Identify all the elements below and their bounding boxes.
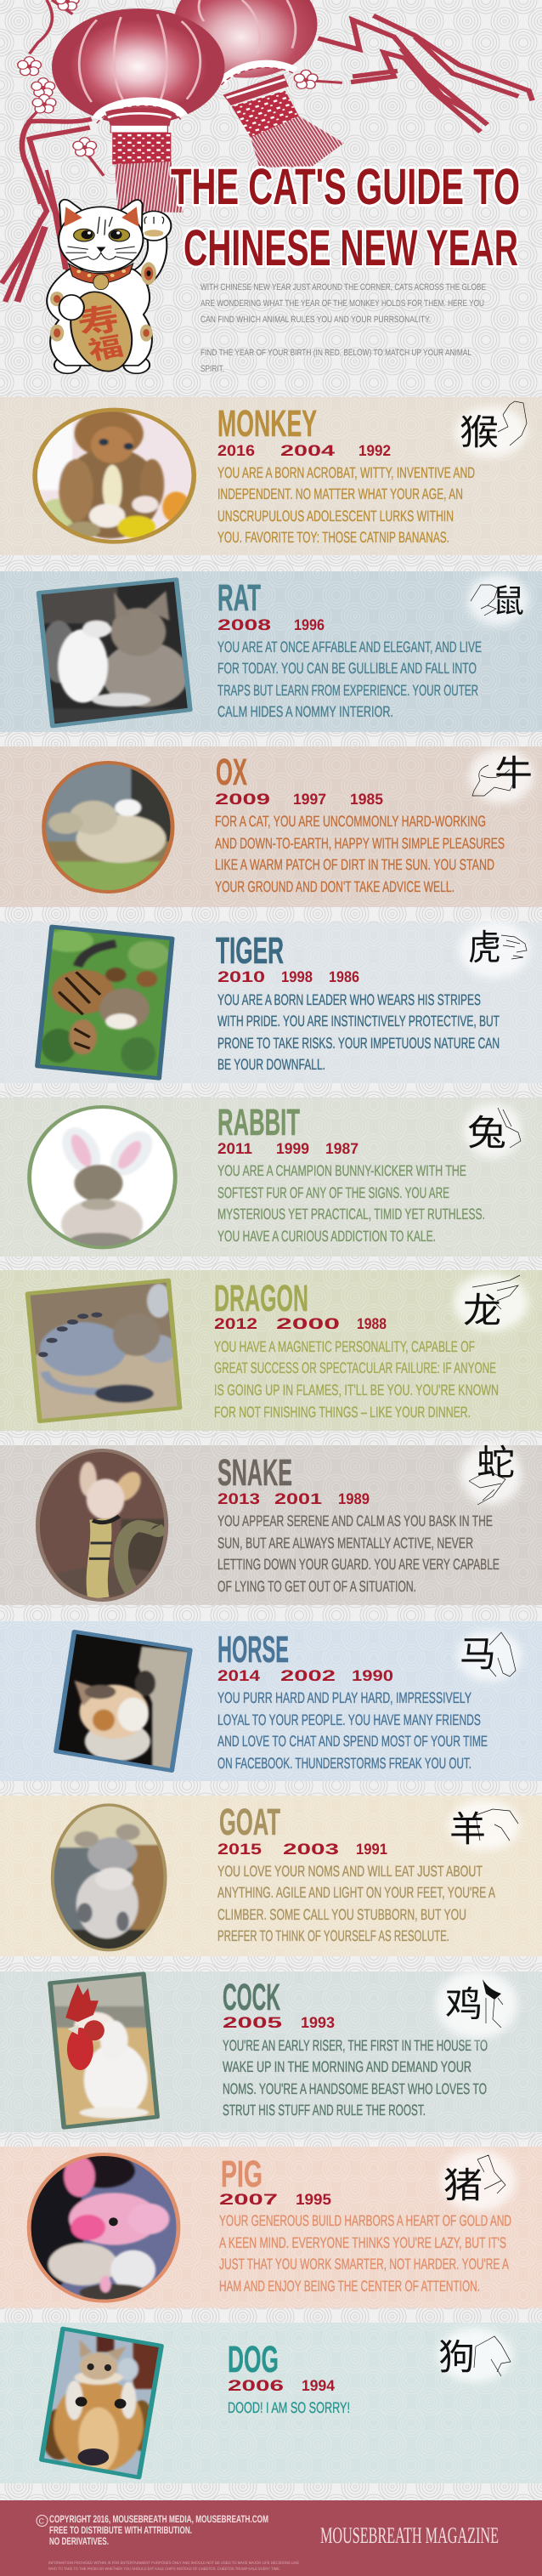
intro text: FIND THE YEAR OF YOUR BIRTH (IN RED, BELOW) TO MATCH UP YOUR ANIMAL [200, 348, 471, 358]
copyright symbol: C [39, 2516, 44, 2525]
ink emblem: rooster [436, 1971, 517, 2039]
heading: SNAKE [217, 1452, 292, 1494]
years: 2007 [219, 2191, 278, 2208]
years: 2010 [217, 968, 265, 985]
years [228, 2377, 335, 2394]
years [214, 1315, 387, 1332]
years [217, 1140, 359, 1157]
description: CALM HIDES A NOMMY INTERIOR. [217, 703, 393, 720]
years: 1989 [338, 1490, 370, 1507]
heading: GOAT [219, 1801, 280, 1843]
description [223, 2037, 488, 2119]
header illustration: lanterns, ribbons and blossoms [2, 0, 533, 302]
ink emblem: ox [469, 749, 534, 803]
panel: goat [0, 1796, 542, 1956]
description: STRUT HIS STUFF AND RULE THE ROOST. [223, 2102, 426, 2119]
intro text [200, 282, 486, 374]
panel: rabbit [0, 1098, 542, 1257]
photo: cat in tiger suit [35, 924, 177, 1080]
heading: RABBIT [217, 1102, 300, 1143]
years: 1987 [325, 1140, 359, 1157]
panel: snake [0, 1443, 542, 1605]
ears [59, 200, 143, 235]
heading: TIGER [216, 930, 284, 972]
description [217, 638, 482, 720]
years: 2014 [217, 1667, 260, 1684]
heading: PIG [221, 2153, 263, 2195]
description: BE YOUR DOWNFALL. [217, 1056, 325, 1073]
years: 1990 [352, 1667, 393, 1684]
gold coin: 寿 [72, 292, 124, 344]
photo: cat groomed as a dragon [24, 1278, 183, 1426]
ink emblem: goat: 羊 [449, 1809, 486, 1849]
years: 1985 [350, 791, 383, 808]
photo: cat with bunny ears [24, 1103, 180, 1252]
years: 2003 [283, 1841, 339, 1858]
description [219, 2212, 511, 2295]
ink emblem: snake: 蛇 [477, 1443, 515, 1483]
description [217, 1863, 495, 1944]
panel: horse [0, 1621, 542, 1781]
copyright symbol [37, 2515, 48, 2527]
photo: cat in monkey suit [31, 406, 197, 547]
ink emblem: ox: 牛 [494, 753, 533, 793]
description: YOU HAVE A CURIOUS ADDICTION TO KALE. [217, 1228, 436, 1245]
ink emblem: dog: 狗 [438, 2337, 475, 2377]
years: 2008 [217, 616, 271, 633]
panel: rat [0, 571, 542, 732]
heading: COCK [223, 1977, 280, 2018]
fine print: WHO TO TAKE TO THE PROM OR WHETHER YOU SHOULD EAT KALE CHIPS INSTEAD OF CHEETOS. CHEETOS TRUMP KALE EVERY TIME. [48, 2567, 280, 2572]
ink emblem: monkey: 猴 [460, 412, 499, 452]
holding paw [59, 295, 84, 320]
photo: white cat with rooster comb [48, 1972, 159, 2128]
fine print: INFORMATION PROVIDED WITHIN IS FOR ENTERTAINMENT PURPOSES ONLY AND SHOULD NOT BE USED TO MAKE MAJOR LIFE DECISIONS LIKE [48, 2561, 299, 2566]
ink emblem: pig [441, 2150, 516, 2211]
ink emblem: tiger [459, 921, 530, 979]
panel: ox [0, 746, 542, 907]
ink emblem: rat [467, 575, 528, 626]
years: 2001 [274, 1490, 322, 1507]
years: 2009 [215, 791, 270, 808]
years: 2013 [217, 1490, 260, 1507]
years: 1997 [293, 791, 326, 808]
copyright text: NO DERIVATIVES. [49, 2535, 109, 2547]
ink emblem: monkey [455, 401, 527, 457]
years [215, 791, 383, 808]
description [215, 813, 505, 895]
right lantern [173, 0, 344, 167]
description: DOOD! I AM SO SORRY! [228, 2399, 350, 2416]
ink emblem: dragon: 龙 [463, 1291, 501, 1331]
heading: DRAGON [214, 1278, 308, 1319]
description [217, 991, 500, 1073]
panel: cock [0, 1971, 542, 2132]
years: 1988 [357, 1315, 387, 1332]
collar [69, 264, 133, 290]
blossom branch [18, 0, 342, 176]
years: 2002 [280, 1667, 336, 1684]
ink emblem: rat: 鼠 [493, 584, 524, 620]
years: 1993 [301, 2014, 335, 2031]
years: 2004 [280, 442, 335, 459]
heading: DOG [228, 2339, 279, 2380]
years [217, 968, 359, 985]
years [217, 1841, 387, 1858]
eyes [74, 229, 130, 241]
photo: cat and rat [35, 578, 194, 729]
ink emblem: dog [438, 2328, 512, 2382]
gold coin: 福 [83, 326, 127, 367]
years: 2012 [214, 1315, 257, 1332]
panel: dog [0, 2323, 542, 2483]
ink emblem: rooster: 鸡 [445, 1984, 483, 2024]
photo: cat in pig hat [19, 2151, 183, 2304]
years: 1994 [302, 2377, 335, 2394]
years: 2005 [223, 2014, 282, 2031]
heading: HORSE [217, 1629, 289, 1671]
photo: cat on a cow [42, 759, 177, 895]
photo: cat in goat costume [48, 1802, 169, 1953]
years [217, 1667, 393, 1684]
panel: monkey [0, 397, 542, 555]
ink emblem: snake [460, 1443, 522, 1505]
panel: dragon [0, 1270, 542, 1431]
copyright text [49, 2513, 268, 2547]
years: 2006 [228, 2377, 284, 2394]
description [217, 1512, 500, 1595]
left lantern [52, 9, 224, 213]
photo: kitten on dog's head [38, 2327, 166, 2480]
ink emblem: dragon [454, 1274, 528, 1331]
heading: MONKEY [217, 403, 317, 445]
description [217, 1162, 485, 1245]
lucky cat illustration [47, 200, 171, 376]
body [47, 270, 152, 373]
head [59, 207, 143, 272]
years [223, 2014, 335, 2031]
face lines and whiskers [65, 217, 137, 260]
years: 1995 [296, 2191, 331, 2208]
raised arm and paw [130, 211, 171, 287]
intro text: CAN FIND WHICH ANIMAL RULES YOU AND YOUR PURRSONALITY. [200, 315, 431, 325]
years [217, 442, 391, 459]
ink emblem: horse: 马 [460, 1634, 496, 1674]
intro text: SPIRIT. [200, 364, 224, 374]
years: 1996 [294, 616, 325, 633]
ink emblem: tiger: 虎 [468, 928, 501, 967]
years: 1991 [356, 1841, 387, 1858]
copyright text: COPYRIGHT 2016, MOUSEBREATH MEDIA, MOUSEBREATH.COM [49, 2513, 268, 2525]
years: 1998 [281, 968, 313, 985]
body spots [50, 262, 156, 342]
photo: hairless cat as a snake [35, 1448, 169, 1603]
ink emblem: rabbit [464, 1104, 522, 1158]
heading: RAT [217, 577, 261, 619]
panel: pig [0, 2147, 542, 2308]
ink emblem: pig: 猪 [443, 2165, 483, 2205]
years: 1999 [276, 1140, 309, 1157]
years: 2000 [276, 1315, 340, 1332]
gold coin [62, 287, 140, 376]
fine print [48, 2561, 299, 2572]
years: 2015 [217, 1841, 262, 1858]
years [219, 2191, 331, 2208]
description: OF LYING TO GET OUT OF A SITUATION. [217, 1578, 416, 1595]
panel: tiger [0, 921, 542, 1083]
years [217, 616, 325, 633]
footer [0, 2500, 542, 2576]
photo: calico kitten [52, 1630, 194, 1774]
left ribbons [2, 119, 92, 302]
years: 1992 [359, 442, 391, 459]
years: 2016 [217, 442, 255, 459]
description [214, 1338, 499, 1421]
description [217, 1689, 488, 1772]
ink emblem: rabbit: 兔 [467, 1113, 506, 1153]
years: 2011 [217, 1140, 252, 1157]
heading: OX [216, 752, 247, 793]
copyright text: FREE TO DISTRIBUTE WITH ATTRIBUTION. [49, 2524, 192, 2536]
years: 1986 [329, 968, 359, 985]
ink emblem: horse [457, 1631, 522, 1682]
description [217, 464, 475, 546]
title [171, 158, 520, 276]
ink emblem: goat [449, 1800, 520, 1851]
right ribbons [318, 15, 533, 132]
inner ears [64, 207, 139, 227]
years [217, 1490, 370, 1507]
